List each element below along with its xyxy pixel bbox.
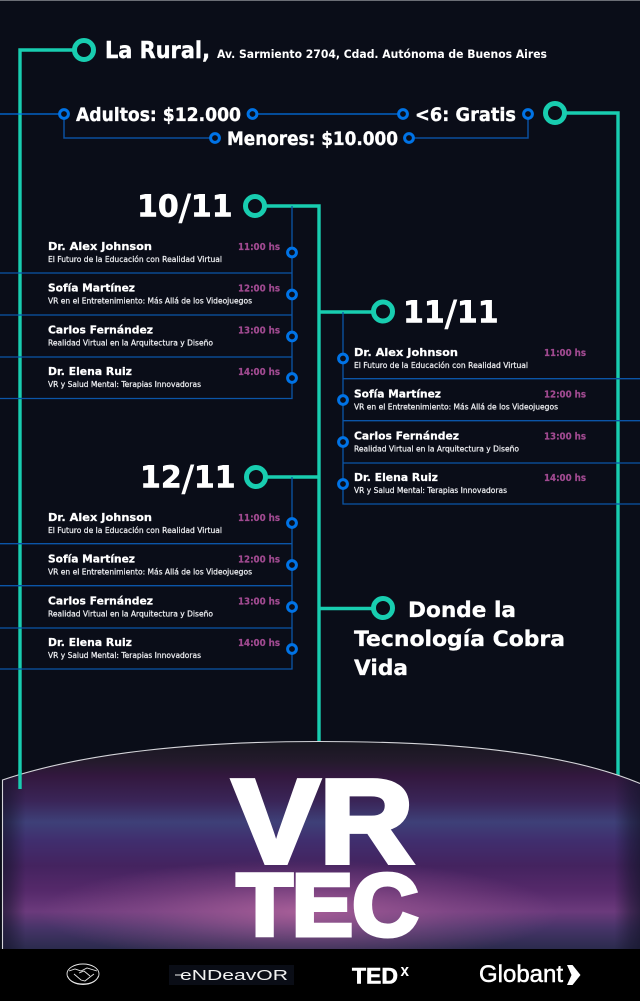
schedule row 3 bbox=[48, 323, 296, 347]
schedule row 1: Dr. Alex Johnson bbox=[354, 346, 458, 359]
schedule row 4 bbox=[339, 471, 586, 495]
banner gradient arch bbox=[2, 742, 640, 949]
heading: date: 11 bbox=[194, 460, 236, 496]
heading: date: 10 bbox=[137, 190, 179, 224]
logo: Endeavor bbox=[169, 965, 294, 985]
heading: date: 12 bbox=[140, 460, 182, 496]
schedule row 3: Carlos Fernández bbox=[48, 323, 153, 336]
schedule row 1: El Futuro de la Educación con Realidad Virtual bbox=[48, 255, 222, 264]
schedule row 2: 12:00 hs bbox=[238, 284, 280, 295]
logo: Endeavor: eNDeavOR bbox=[180, 968, 288, 984]
schedule row 1: Dr. Alex Johnson bbox=[48, 511, 152, 524]
heading: venue: La Rural, bbox=[105, 38, 210, 64]
icon: date node bbox=[246, 468, 266, 486]
panel: day 12/11 bbox=[0, 458, 296, 669]
icon: price teal node bbox=[546, 104, 564, 122]
heading: date: 11 bbox=[457, 296, 499, 330]
schedule row 1 bbox=[48, 511, 296, 535]
schedule row 2 bbox=[48, 553, 296, 577]
panel: day 10/11 bbox=[0, 188, 296, 398]
logo: Globant: Globant bbox=[479, 961, 563, 988]
schedule row 1: El Futuro de la Educación con Realidad Virtual bbox=[48, 526, 222, 535]
text: adult price: Adultos: $12.000 bbox=[76, 104, 241, 126]
text: under six price: <6: Gratis bbox=[415, 104, 516, 126]
icon: handshake logo bbox=[67, 964, 99, 984]
connector: right teal line bbox=[565, 113, 618, 778]
schedule row 2: 12:00 hs bbox=[544, 390, 586, 401]
schedule row 3 bbox=[48, 594, 296, 618]
panel: prices bbox=[0, 104, 564, 150]
logo: VR: VR bbox=[232, 756, 414, 888]
panel: location bbox=[20, 38, 547, 789]
logo: TEC: TEC bbox=[237, 857, 418, 954]
logo: TEDx bbox=[352, 961, 409, 988]
schedule row 3 bbox=[339, 429, 586, 453]
schedule row 4: 14:00 hs bbox=[544, 473, 586, 484]
heading: date: / bbox=[179, 188, 192, 228]
connector: schedule lines bbox=[0, 206, 292, 398]
schedule row 4: VR y Salud Mental: Terapias Innovadoras bbox=[354, 486, 507, 495]
heading: date: / bbox=[445, 294, 458, 334]
connector: lower price lines bbox=[64, 114, 528, 138]
schedule row 3: Realidad Virtual en la Arquitectura y Diseño bbox=[48, 609, 213, 618]
schedule row 1 bbox=[48, 240, 296, 264]
logo: TEDx: x bbox=[400, 961, 409, 980]
schedule row 4 bbox=[48, 636, 296, 660]
schedule row 3: Carlos Fernández bbox=[354, 429, 459, 442]
schedule row 3: Carlos Fernández bbox=[48, 594, 153, 607]
schedule row 2: VR en el Entretenimiento: Más Allá de los Videojuegos bbox=[354, 403, 558, 412]
schedule row 1 bbox=[339, 346, 586, 370]
schedule row 1: Dr. Alex Johnson bbox=[48, 240, 152, 253]
schedule row 3: 13:00 hs bbox=[238, 596, 280, 607]
text: slogan: Donde la bbox=[408, 598, 516, 622]
text: slogan bbox=[354, 598, 565, 680]
connector: left teal line end bbox=[18, 770, 22, 789]
schedule row 2: Sofía Martínez bbox=[48, 553, 135, 566]
schedule row 1: 11:00 hs bbox=[544, 348, 586, 359]
connector: schedule lines bbox=[343, 312, 640, 504]
panel: sponsors footer bbox=[0, 949, 640, 1001]
schedule row 1: 11:00 hs bbox=[238, 242, 280, 253]
schedule row 4: Dr. Elena Ruiz bbox=[48, 365, 132, 378]
schedule row 4: Dr. Elena Ruiz bbox=[354, 471, 438, 484]
heading: date: / bbox=[182, 458, 195, 500]
text: minor price: Menores: $10.000 bbox=[227, 128, 398, 150]
arch outline bbox=[2, 742, 640, 949]
logo: TEDx: TED bbox=[352, 964, 398, 988]
connector: central teal trunk bbox=[265, 206, 373, 745]
connector: price lines bbox=[0, 113, 398, 115]
schedule row 2 bbox=[48, 282, 296, 306]
schedule row 4: 14:00 hs bbox=[238, 367, 280, 378]
schedule row 1: El Futuro de la Educación con Realidad Virtual bbox=[354, 361, 528, 370]
schedule row 4: VR y Salud Mental: Terapias Innovadoras bbox=[48, 380, 201, 389]
panel: VR TEC banner bbox=[2, 742, 640, 954]
schedule row 3: 13:00 hs bbox=[544, 431, 586, 442]
panel: day 11/11 bbox=[339, 294, 640, 504]
schedule row 2: Sofía Martínez bbox=[354, 388, 441, 401]
icon: price nodes bbox=[60, 110, 532, 142]
heading: date: 11 bbox=[403, 296, 445, 330]
icon: date node bbox=[246, 196, 264, 216]
schedule row 2: VR en el Entretenimiento: Más Allá de los Videojuegos bbox=[48, 297, 252, 306]
schedule row 3: 13:00 hs bbox=[238, 325, 280, 336]
icon: slogan node bbox=[374, 598, 392, 618]
text: slogan: Tecnología Cobra bbox=[354, 627, 565, 651]
schedule row 4: VR y Salud Mental: Terapias Innovadoras bbox=[48, 651, 201, 660]
icon: location node bbox=[74, 40, 94, 60]
schedule row 1: 11:00 hs bbox=[238, 513, 280, 524]
panel: slogan bbox=[354, 598, 565, 680]
icon: date node bbox=[374, 302, 392, 321]
schedule row 4: 14:00 hs bbox=[238, 638, 280, 649]
heading: date: 11 bbox=[191, 190, 233, 224]
schedule row 2 bbox=[339, 388, 586, 412]
schedule row 4 bbox=[48, 365, 296, 389]
connector: schedule lines bbox=[0, 477, 292, 669]
connector: left teal line bbox=[20, 50, 74, 789]
text: slogan: Vida bbox=[354, 656, 408, 680]
schedule row 2: Sofía Martínez bbox=[48, 282, 135, 295]
schedule row 3: Realidad Virtual en la Arquitectura y Diseño bbox=[48, 338, 213, 347]
schedule row 2: 12:00 hs bbox=[238, 555, 280, 566]
schedule row 3: Realidad Virtual en la Arquitectura y Diseño bbox=[354, 444, 519, 453]
text: address: Av. Sarmiento 2704, Cdad. Autónoma de Buenos Aires bbox=[217, 47, 547, 61]
schedule row 2: VR en el Entretenimiento: Más Allá de los Videojuegos bbox=[48, 568, 252, 577]
schedule row 4: Dr. Elena Ruiz bbox=[48, 636, 132, 649]
